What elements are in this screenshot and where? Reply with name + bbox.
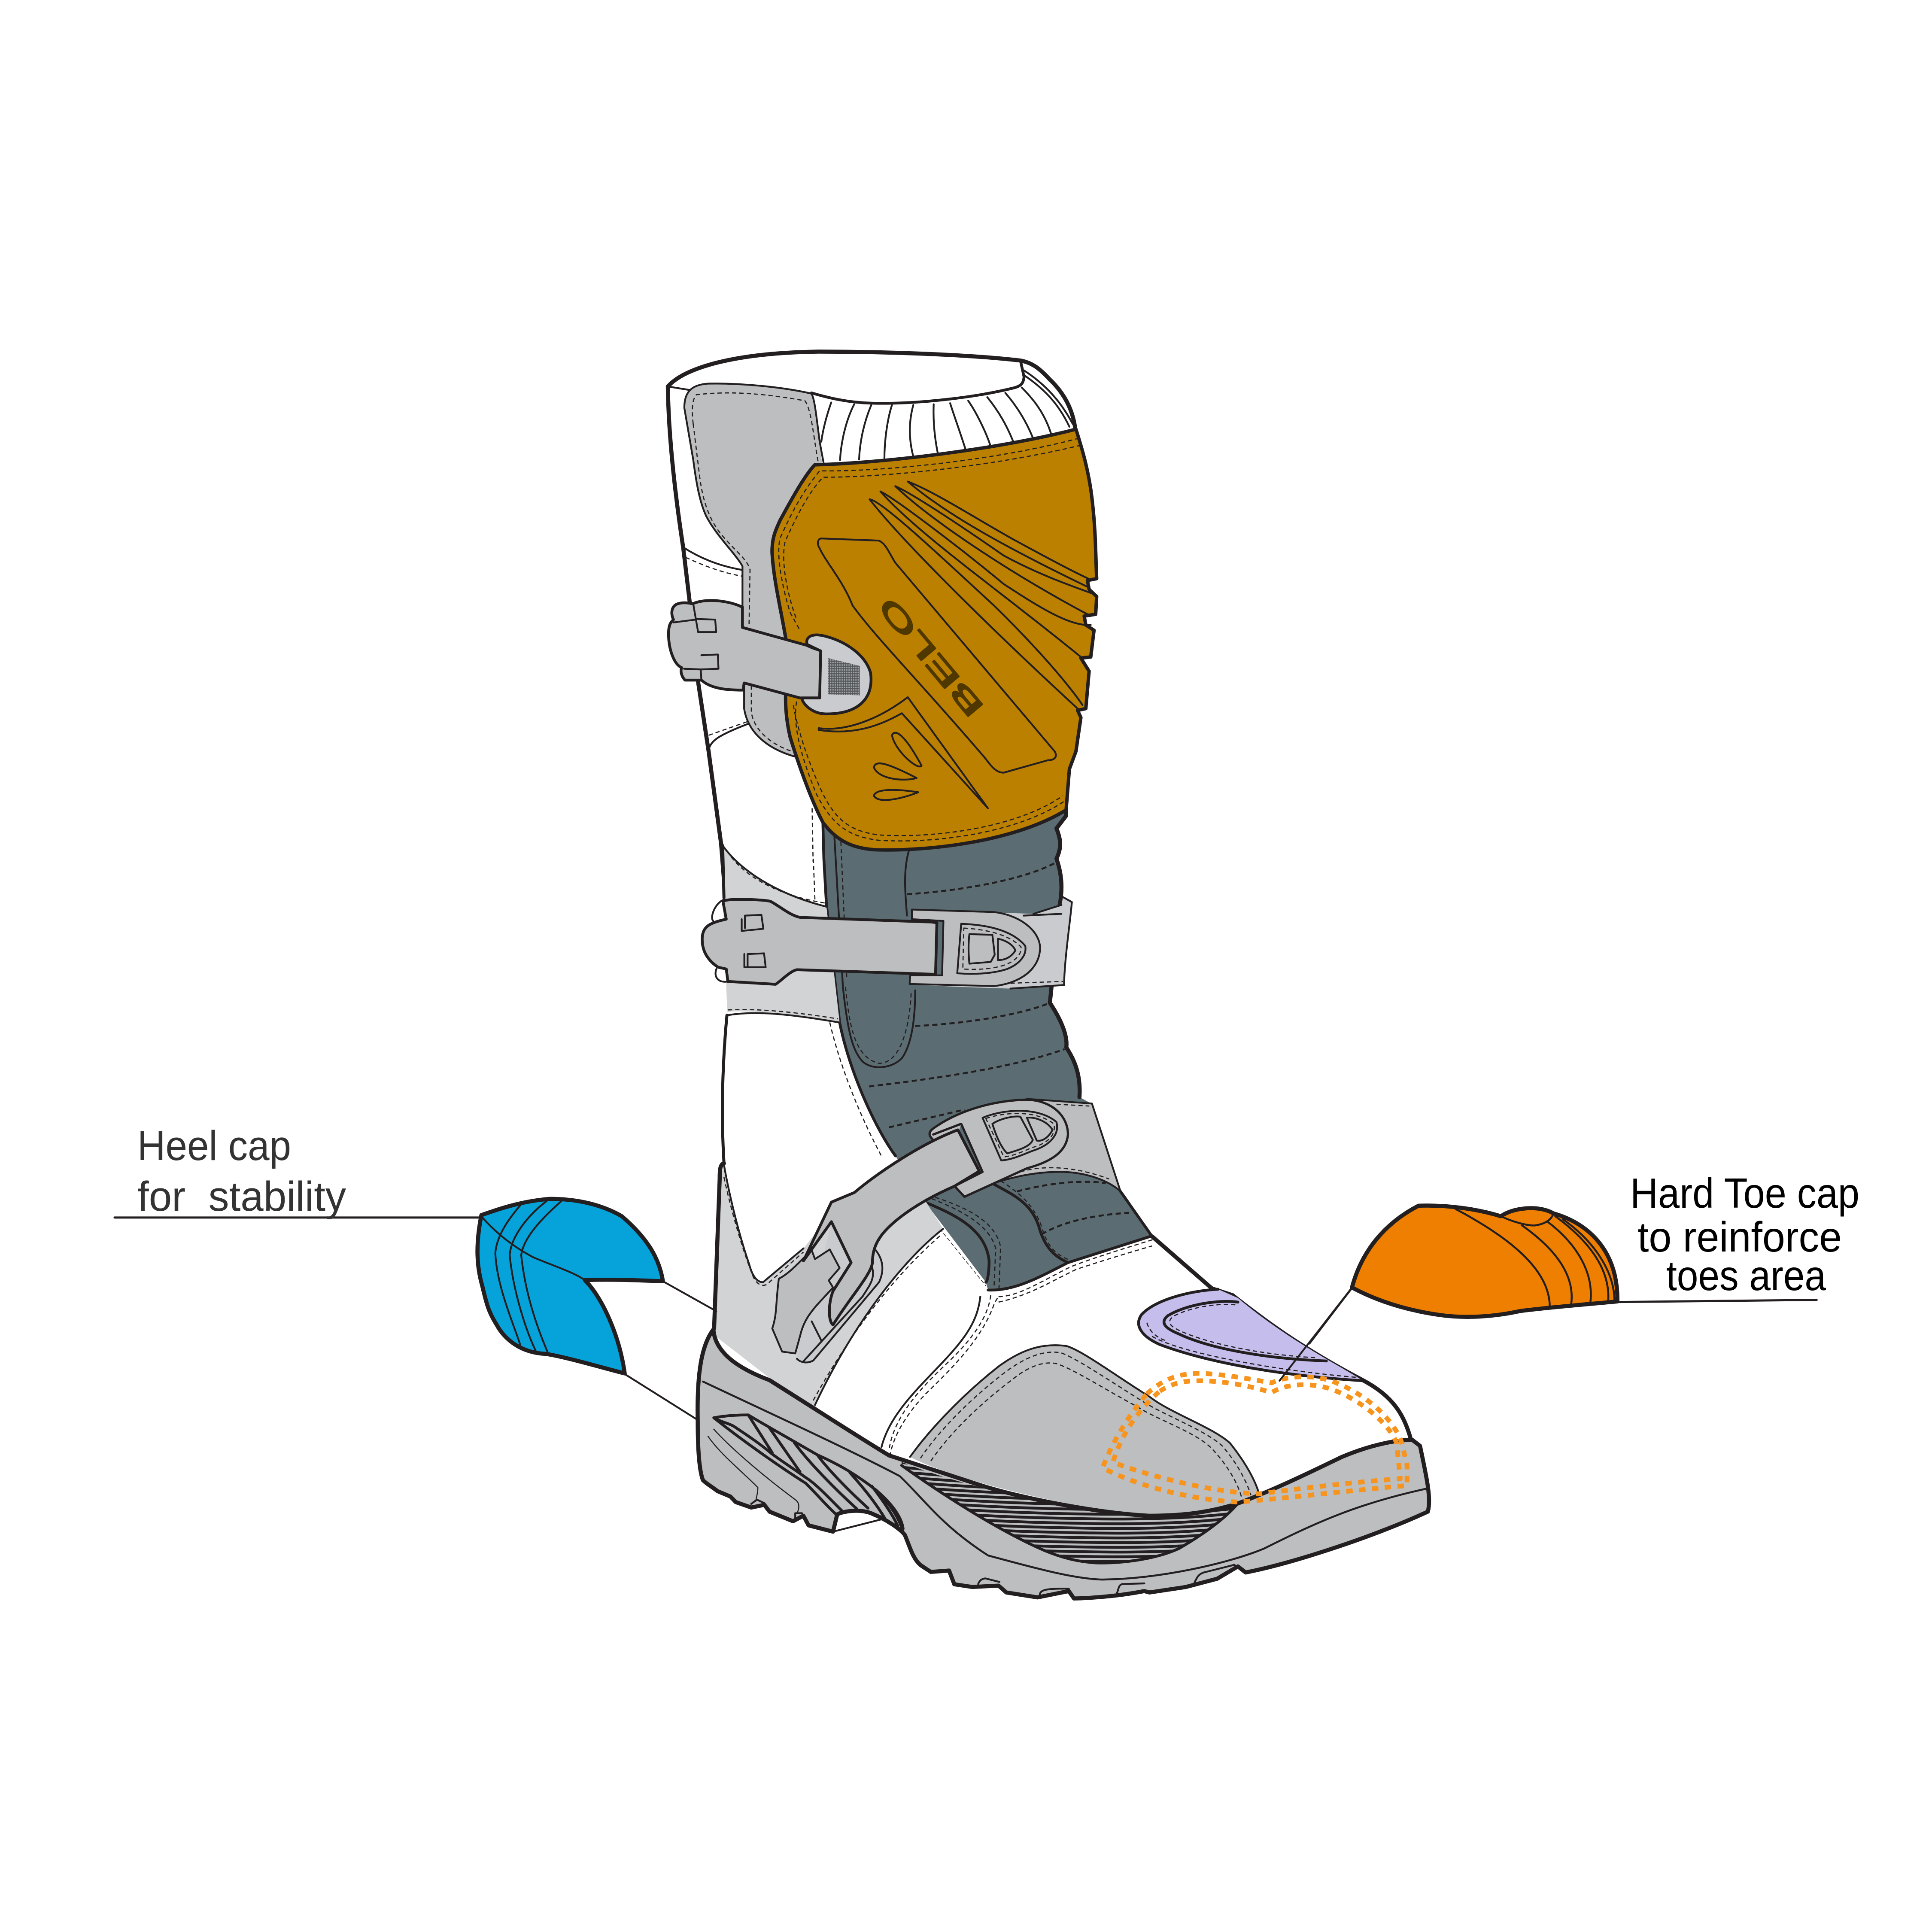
hatched arch [902, 1463, 1240, 1595]
heel counter plate [714, 1163, 943, 1425]
hard toe cap label: toes area [1666, 1252, 1826, 1299]
leader lines: toe cap [1279, 1287, 1817, 1381]
shin side panel [684, 383, 823, 759]
brand logo on shin guard: BELO [872, 592, 990, 723]
toe patch [910, 1345, 1259, 1516]
hard toe cap label: Hard Toe cap [1630, 1170, 1859, 1217]
orange shin guard [772, 429, 1097, 850]
boot illustration [668, 352, 1429, 1598]
upper buckle and strap [668, 601, 871, 714]
leader lines: heel cap [115, 1218, 716, 1420]
middle buckle and strap [702, 897, 1072, 989]
lavender toe panel [1139, 1289, 1363, 1381]
boot shaft and collar [668, 352, 1076, 894]
heel cap label: Heel cap [137, 1122, 291, 1169]
vamp with toe patch, seams and toe panel [881, 1236, 1411, 1516]
callout: heel cap [115, 1122, 716, 1420]
slate tongue panel [813, 777, 1152, 1290]
icon: blue heel cap [477, 1199, 663, 1373]
heel cap label: for stability [137, 1173, 346, 1220]
outsole [698, 1330, 1429, 1598]
heel tread pattern [708, 1415, 903, 1530]
callout: hard toe cap [1279, 1170, 1859, 1381]
hard toe cap label: to reinforce [1637, 1213, 1842, 1261]
icon: orange toe cap [1352, 1206, 1617, 1317]
light grey ankle band [723, 845, 840, 1163]
orange dashed toe cap outline [1103, 1373, 1407, 1502]
lower buckle and ankle strap [772, 1099, 1121, 1362]
